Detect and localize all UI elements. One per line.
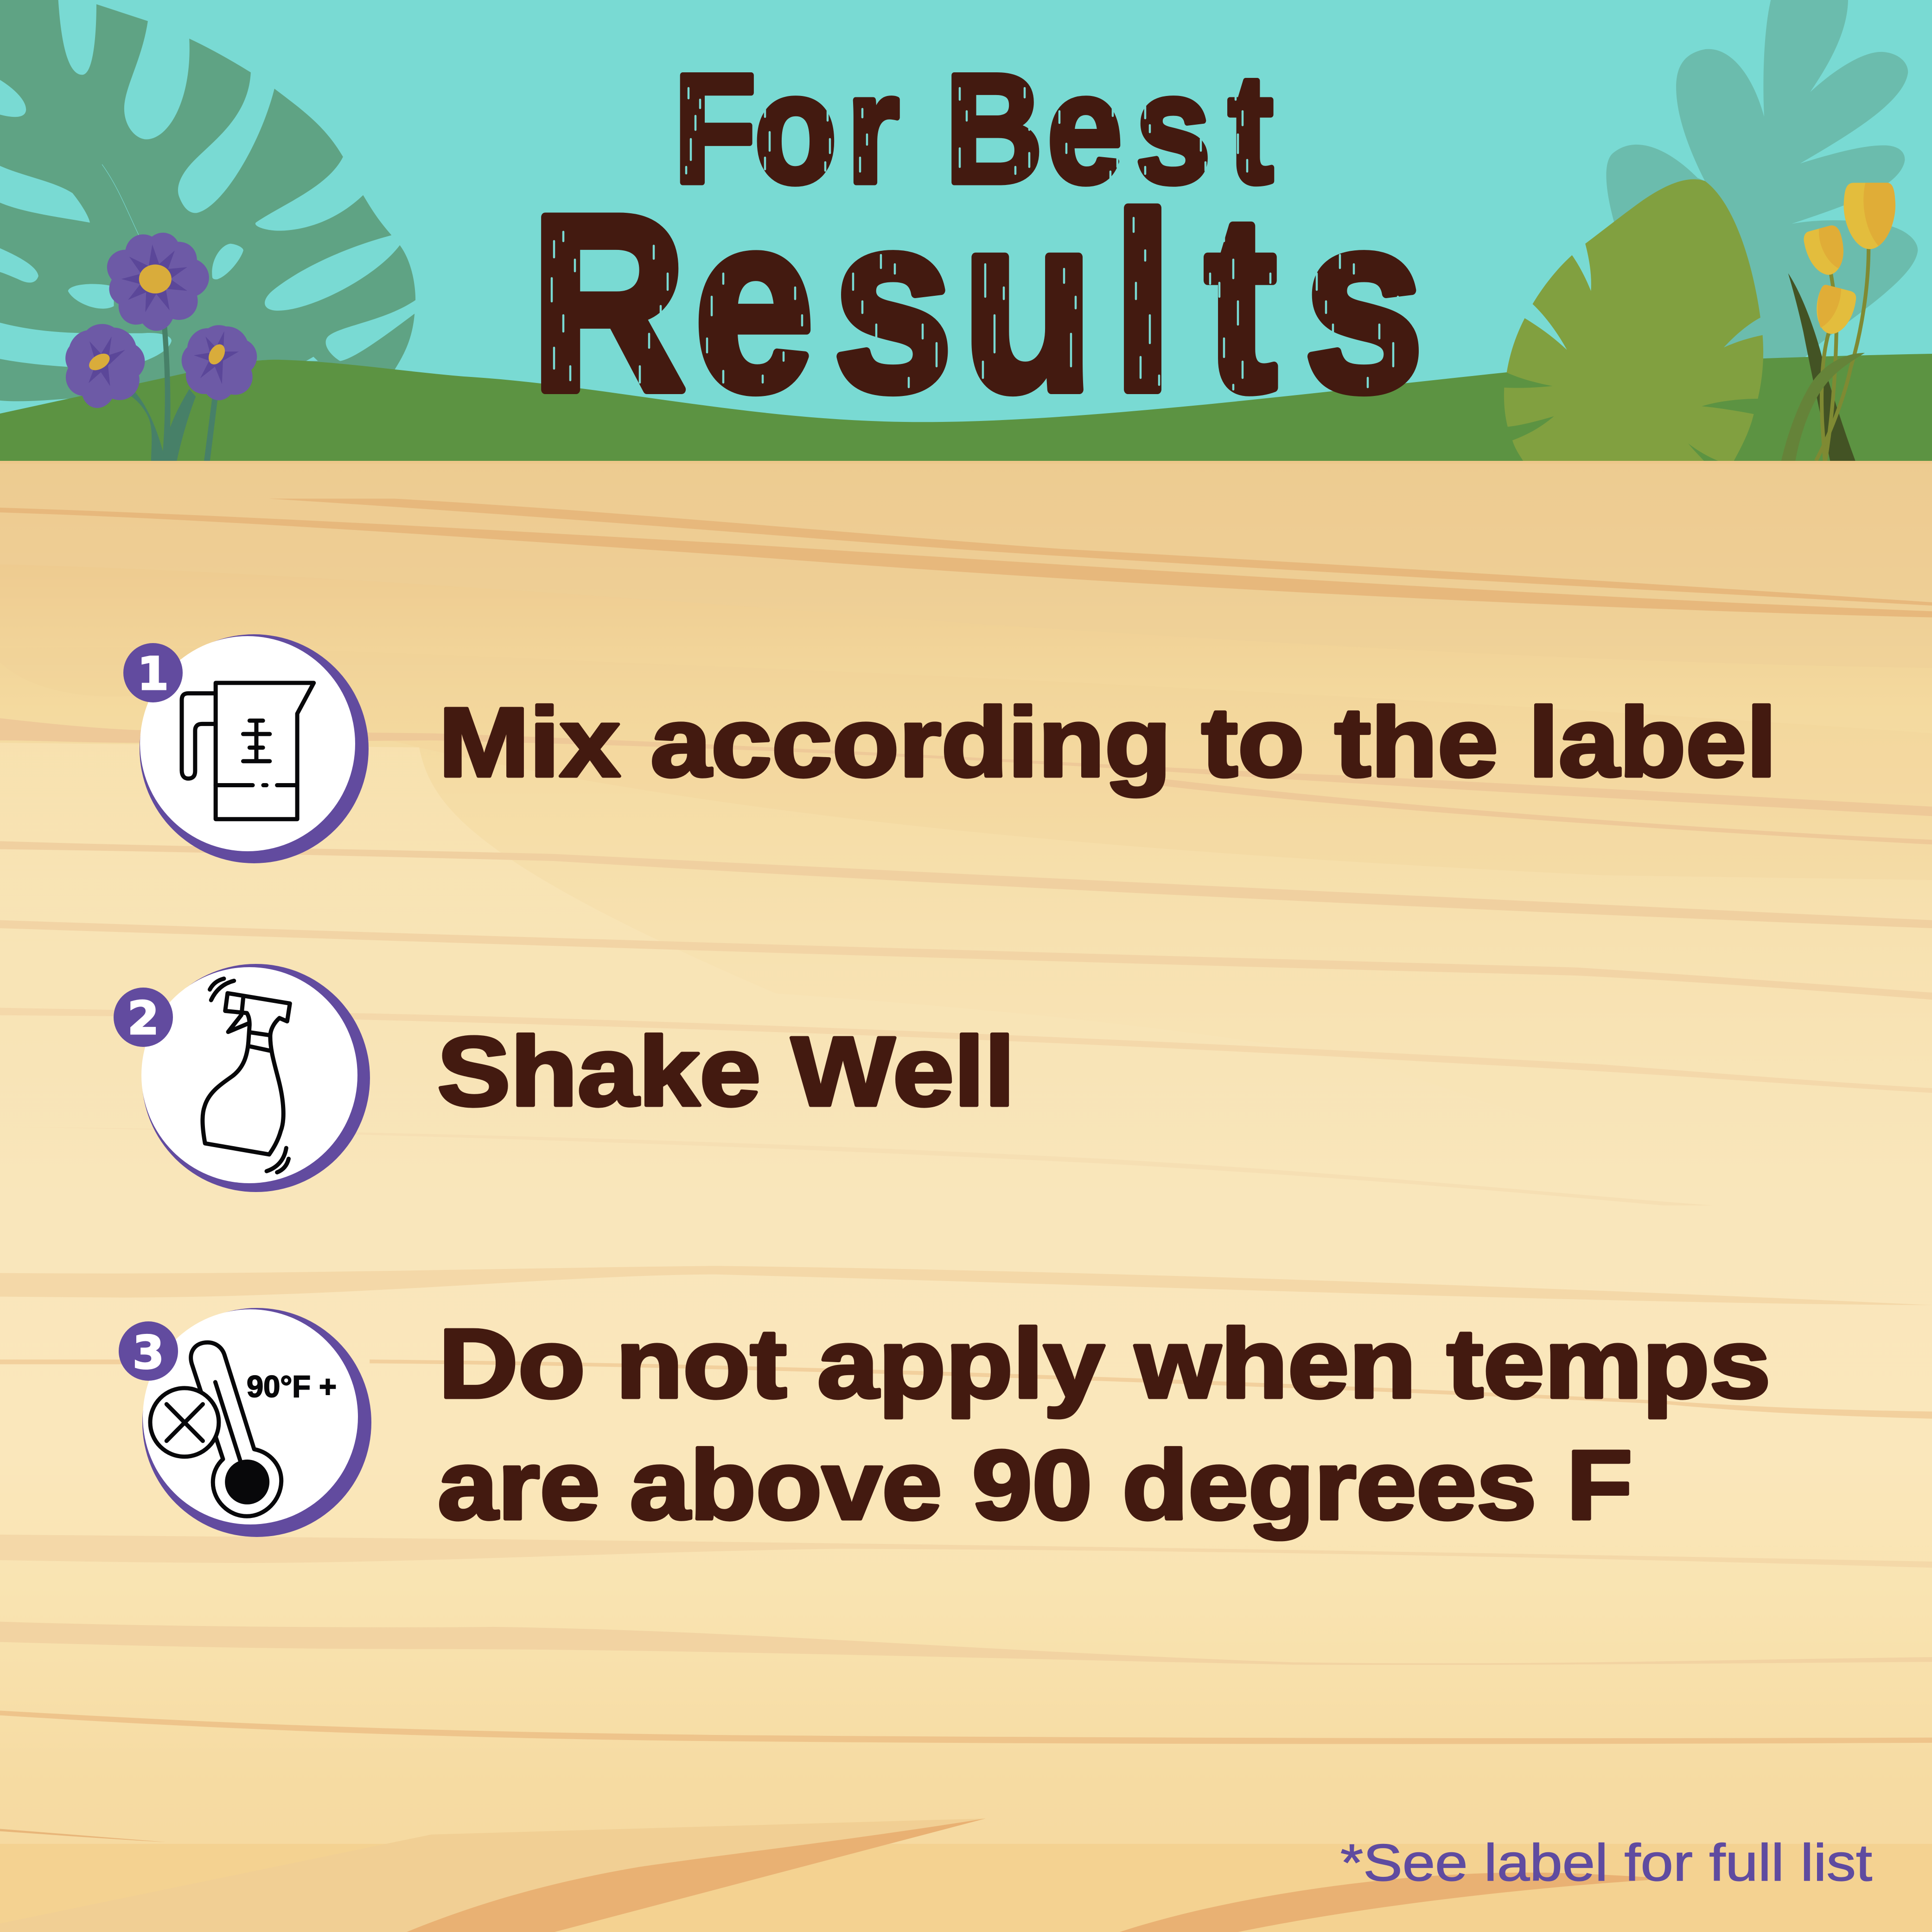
- title line: Results: Results: [531, 163, 1423, 443]
- tulip: right: [1843, 183, 1895, 249]
- olive leaf: [1504, 179, 1763, 461]
- wood grain lines upper: [0, 499, 1932, 1205]
- badge 2: [114, 988, 173, 1047]
- right flower: [178, 319, 260, 402]
- step 1 text: Mix according to the label: [439, 687, 1777, 797]
- tulip: upper left: [1804, 225, 1843, 275]
- icon: measuring jug: [182, 683, 314, 819]
- wood panel background: [0, 461, 1932, 1932]
- wood grain lines lower: [0, 1266, 1932, 1932]
- wood tone overlays: [0, 464, 1932, 1623]
- sky background: [0, 0, 1932, 461]
- badge 3: 3: [133, 1326, 164, 1379]
- step 1: mix: [123, 634, 1777, 863]
- green grass blade: [1781, 353, 1865, 461]
- wood grain bottom right: [1120, 1873, 1669, 1932]
- icon circle 1: [140, 634, 369, 863]
- left flower: [58, 320, 147, 411]
- purple flowers: [58, 228, 260, 461]
- flower stems: [124, 326, 218, 461]
- icon circle 3: [142, 1308, 371, 1537]
- icon: spray bottle: [203, 979, 290, 1173]
- step 3 text: are above 90 degrees F: [438, 1430, 1632, 1540]
- step 3 text: [438, 1308, 1771, 1540]
- footnote: *See label for full list: [1340, 1834, 1872, 1892]
- teal background leaves: [1606, 0, 1918, 362]
- badge 3: [119, 1321, 178, 1381]
- tulip stems: [1816, 247, 1868, 461]
- badge 1: [123, 643, 183, 702]
- tropical leaf and tulips: [1504, 179, 1895, 461]
- icon: thermometer: [150, 1342, 281, 1516]
- icon label: 90F plus: 90°F +: [247, 1369, 337, 1403]
- title distress texture: [552, 88, 1398, 389]
- tulip: lower: [1817, 285, 1856, 334]
- icon circle 2: [142, 964, 370, 1192]
- step 2 text: Shake Well: [437, 1016, 1015, 1126]
- green hill: [0, 354, 1932, 461]
- title: [531, 42, 1423, 443]
- step 2: shake: [114, 964, 1015, 1192]
- monstera leaf: [0, 0, 415, 422]
- big flower: [102, 228, 210, 332]
- step 3: temperature: [119, 1308, 1771, 1540]
- title line: For Best: For Best: [674, 42, 1273, 215]
- step 3 text: Do not apply when temps: [439, 1308, 1771, 1418]
- badge 1: 1: [137, 648, 169, 701]
- dark grass blade: [1788, 273, 1855, 461]
- badge 2: 2: [128, 992, 159, 1045]
